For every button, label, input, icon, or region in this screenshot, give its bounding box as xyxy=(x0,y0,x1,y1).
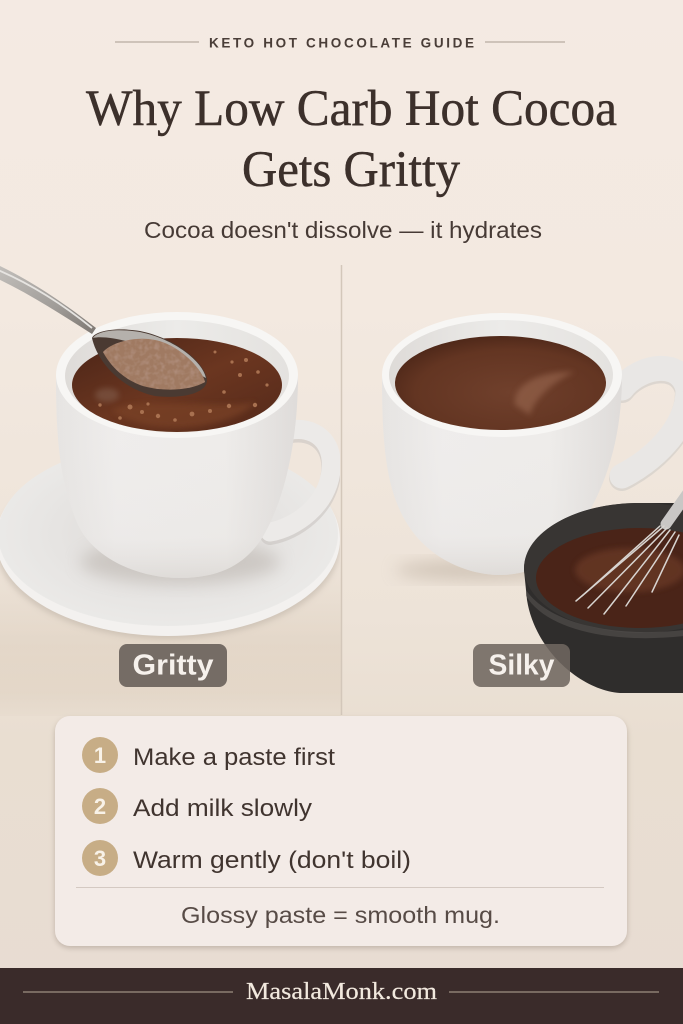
step 2 xyxy=(82,788,312,824)
step 1: Make a paste first xyxy=(133,744,335,771)
divider between photos xyxy=(340,265,342,715)
step 3: Warm gently (don't boil) xyxy=(133,847,411,874)
mug body xyxy=(382,313,622,575)
title: Why Low Carb Hot Cocoa xyxy=(86,81,617,137)
step 1: 1 xyxy=(94,743,106,768)
spoon with cocoa powder xyxy=(0,266,207,397)
mug shadow xyxy=(395,560,565,580)
saucer xyxy=(0,463,340,640)
paste in bowl xyxy=(536,528,683,628)
website name: MasalaMonk.com xyxy=(246,979,437,1005)
title: Gets Gritty xyxy=(242,142,460,198)
mug handle xyxy=(270,429,331,535)
label: Gritty xyxy=(119,644,227,687)
mug handle xyxy=(622,368,683,478)
eyebrow heading: KETO HOT CHOCOLATE GUIDE xyxy=(209,36,474,50)
dark bowl xyxy=(524,503,683,693)
mug body xyxy=(56,312,298,578)
panel: steps xyxy=(55,716,627,948)
step 3 xyxy=(82,840,411,876)
title xyxy=(86,81,617,198)
step 2: Add milk slowly xyxy=(133,795,312,822)
whisk xyxy=(576,490,683,614)
footer bar xyxy=(0,968,683,1024)
silky cocoa surface xyxy=(395,336,606,430)
takeaway line: Glossy paste = smooth mug. xyxy=(181,902,500,928)
step 3: 3 xyxy=(94,846,106,871)
gritty cocoa surface xyxy=(72,338,282,432)
label: Silky: Silky xyxy=(488,650,554,682)
label: Gritty: Gritty xyxy=(132,650,214,682)
subtitle: Cocoa doesn't dissolve — it hydrates xyxy=(144,217,542,243)
step 2: 2 xyxy=(94,794,106,819)
label: Silky xyxy=(473,644,570,687)
photo: silky mug and whisked paste xyxy=(382,313,683,693)
step 1 xyxy=(82,737,335,773)
photo: gritty mug xyxy=(0,266,340,639)
